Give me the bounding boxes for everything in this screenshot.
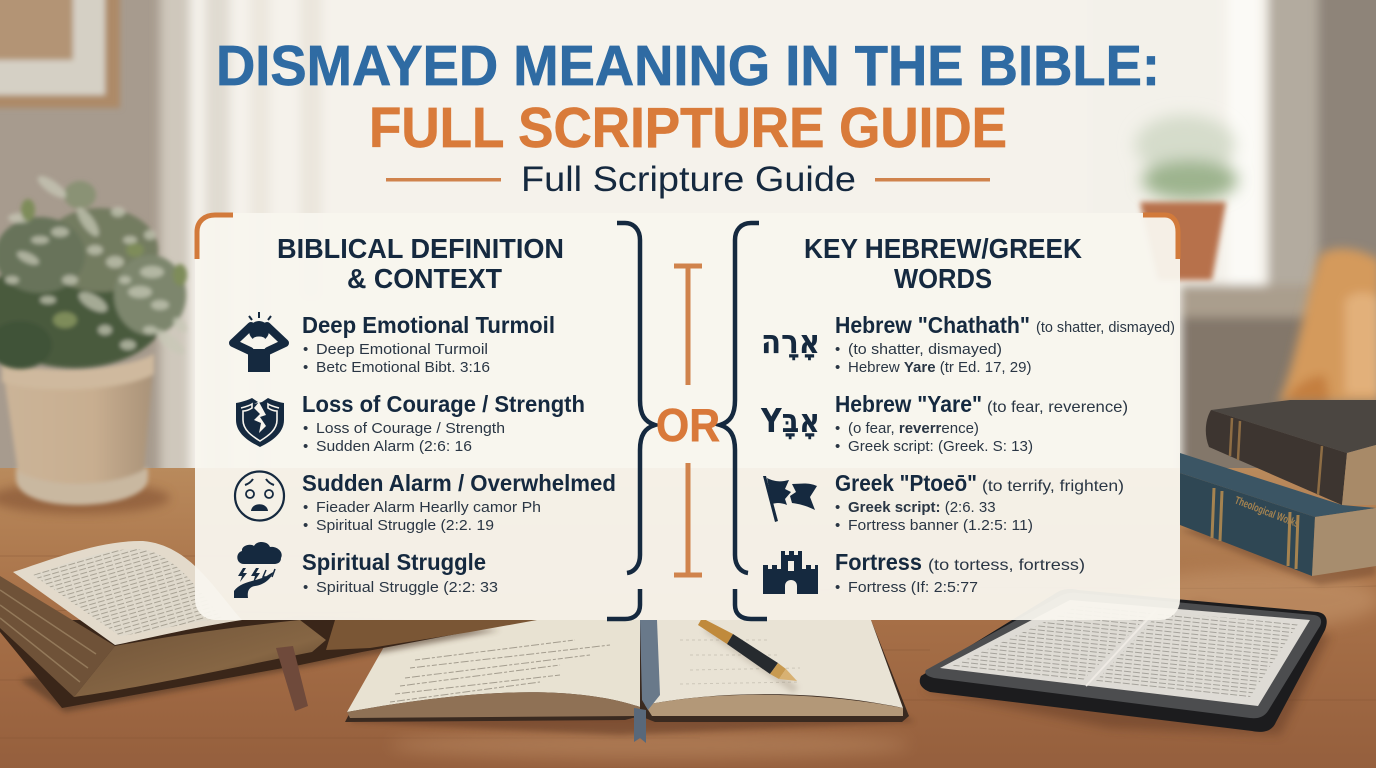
tablet (920, 589, 1330, 735)
window plant (1135, 115, 1238, 200)
icon: castle (763, 551, 818, 594)
orange corner accent: right (1143, 215, 1178, 259)
stacked theological books (1180, 400, 1376, 585)
item: greek ptoeo: Greek script: (2:6. 33 (848, 499, 996, 516)
item: sudden alarm: Sudden Alarm / Overwhelmed (302, 470, 616, 496)
item: spiritual struggle (234, 542, 498, 598)
potted plant (0, 172, 190, 514)
item: loss of courage: Loss of Courage / Strength (316, 420, 505, 437)
icon: distressed person (233, 312, 285, 372)
panel heading: biblical definition: BIBLICAL DEFINITION (277, 233, 564, 264)
item: deep emotional turmoil: • (303, 359, 308, 376)
upper brown book (1211, 400, 1376, 453)
panel heading: key words: WORDS (894, 263, 992, 294)
item: spiritual struggle: Spiritual Struggle (2:2: 33 (316, 579, 498, 596)
item: fortress: Fortress (If: 2:5:77 (848, 579, 978, 596)
panel: translucent content card (195, 213, 1180, 620)
item: sudden alarm: • (303, 517, 308, 534)
item: greek ptoeo: Greek "Ptoeō" (835, 470, 977, 496)
title: DISMAYED MEANING IN THE BIBLE: (216, 34, 1160, 98)
item: spiritual struggle: • (303, 579, 308, 596)
item: hebrew yare: (o fear, reverrence) (848, 420, 979, 437)
item: hebrew yare: (to fear, reverence) (987, 399, 1128, 416)
left bracket (607, 223, 655, 619)
panel heading: key words (804, 233, 1082, 294)
item: loss of courage: • (303, 438, 308, 455)
item: hebrew chathath: (to shatter, dismayed) (848, 341, 1002, 358)
icon: hebrew and latin letters: Yאָבָּ (760, 401, 820, 440)
title: FULL SCRIPTURE GUIDE (369, 96, 1007, 160)
item: hebrew chathath (761, 312, 1175, 376)
item: hebrew chathath: • (835, 359, 840, 376)
item: fortress: Fortress (835, 549, 922, 575)
item: hebrew chathath: Hebrew "Chathath" (835, 312, 1030, 338)
open notebook with handwriting (345, 620, 915, 743)
item: sudden alarm: • (303, 499, 308, 516)
item: loss of courage: Sudden Alarm (2:6: 16 (316, 438, 472, 455)
item: greek ptoeo: • (835, 517, 840, 534)
item: hebrew yare (760, 391, 1128, 455)
icon: storm cloud and road (234, 542, 282, 598)
item: deep emotional turmoil (233, 312, 555, 376)
icon: broken shield (236, 398, 284, 447)
bright table glare (1120, 570, 1376, 630)
item: loss of courage: • (303, 420, 308, 437)
item: greek ptoeo: (to terrify, frighten) (982, 478, 1124, 495)
item: fortress (763, 549, 1085, 596)
item: greek ptoeo: • (835, 499, 840, 516)
orange cushion (1278, 249, 1376, 402)
item: deep emotional turmoil: Betc Emotional Bibt. 3:16 (316, 359, 490, 376)
icon: worried face (235, 472, 284, 520)
subtitle with side rules (386, 160, 990, 199)
item: deep emotional turmoil: Deep Emotional Turmoil (302, 312, 555, 338)
title (216, 34, 1160, 160)
lower teal book (1180, 453, 1376, 517)
item: hebrew chathath: • (835, 341, 840, 358)
fountain pen (698, 618, 797, 690)
icon: torn banner (763, 476, 817, 522)
item: deep emotional turmoil: • (303, 341, 308, 358)
item: hebrew chathath: Hebrew Yare (tr Ed. 17, 29) (848, 359, 1031, 376)
orange corner accent: left (197, 215, 233, 259)
item: deep emotional turmoil: Deep Emotional Turmoil (316, 341, 488, 358)
item: loss of courage: Loss of Courage / Strength (302, 391, 585, 417)
item: spiritual struggle: Spiritual Struggle (302, 549, 486, 575)
item: loss of courage (236, 391, 585, 455)
item: sudden alarm: Spiritual Struggle (2:2. 19 (316, 517, 494, 534)
item: hebrew chathath: (to shatter, dismayed) (1036, 320, 1175, 336)
right bracket (720, 223, 767, 619)
item: sudden alarm: Fieader Alarm Hearlly camor Ph (316, 499, 541, 516)
panel heading: biblical definition (277, 233, 564, 294)
stacked theological books: Theological Works (1233, 495, 1301, 530)
item: fortress: • (835, 579, 840, 596)
item: greek ptoeo: Fortress banner (1.2:5: 11) (848, 517, 1033, 534)
OR divider: OR (656, 399, 720, 451)
item: greek ptoeo (763, 470, 1124, 534)
item: sudden alarm (235, 470, 616, 534)
icon: hebrew letters: אָרָה (761, 322, 820, 361)
wood table (0, 468, 1376, 768)
panel heading: key words: KEY HEBREW/GREEK (804, 233, 1082, 264)
item: hebrew yare: • (835, 420, 840, 437)
wall picture frame (0, 0, 120, 108)
OR divider (656, 266, 720, 575)
item: fortress: (to tortess, fortress) (928, 557, 1085, 574)
item: hebrew yare: Greek script: (Greek. S: 13) (848, 438, 1033, 455)
open bible on table (0, 541, 537, 712)
subtitle with side rules: Full Scripture Guide (521, 160, 856, 199)
item: hebrew yare: • (835, 438, 840, 455)
panel heading: biblical definition: & CONTEXT (347, 263, 502, 294)
item: hebrew yare: Hebrew "Yare" (835, 391, 982, 417)
